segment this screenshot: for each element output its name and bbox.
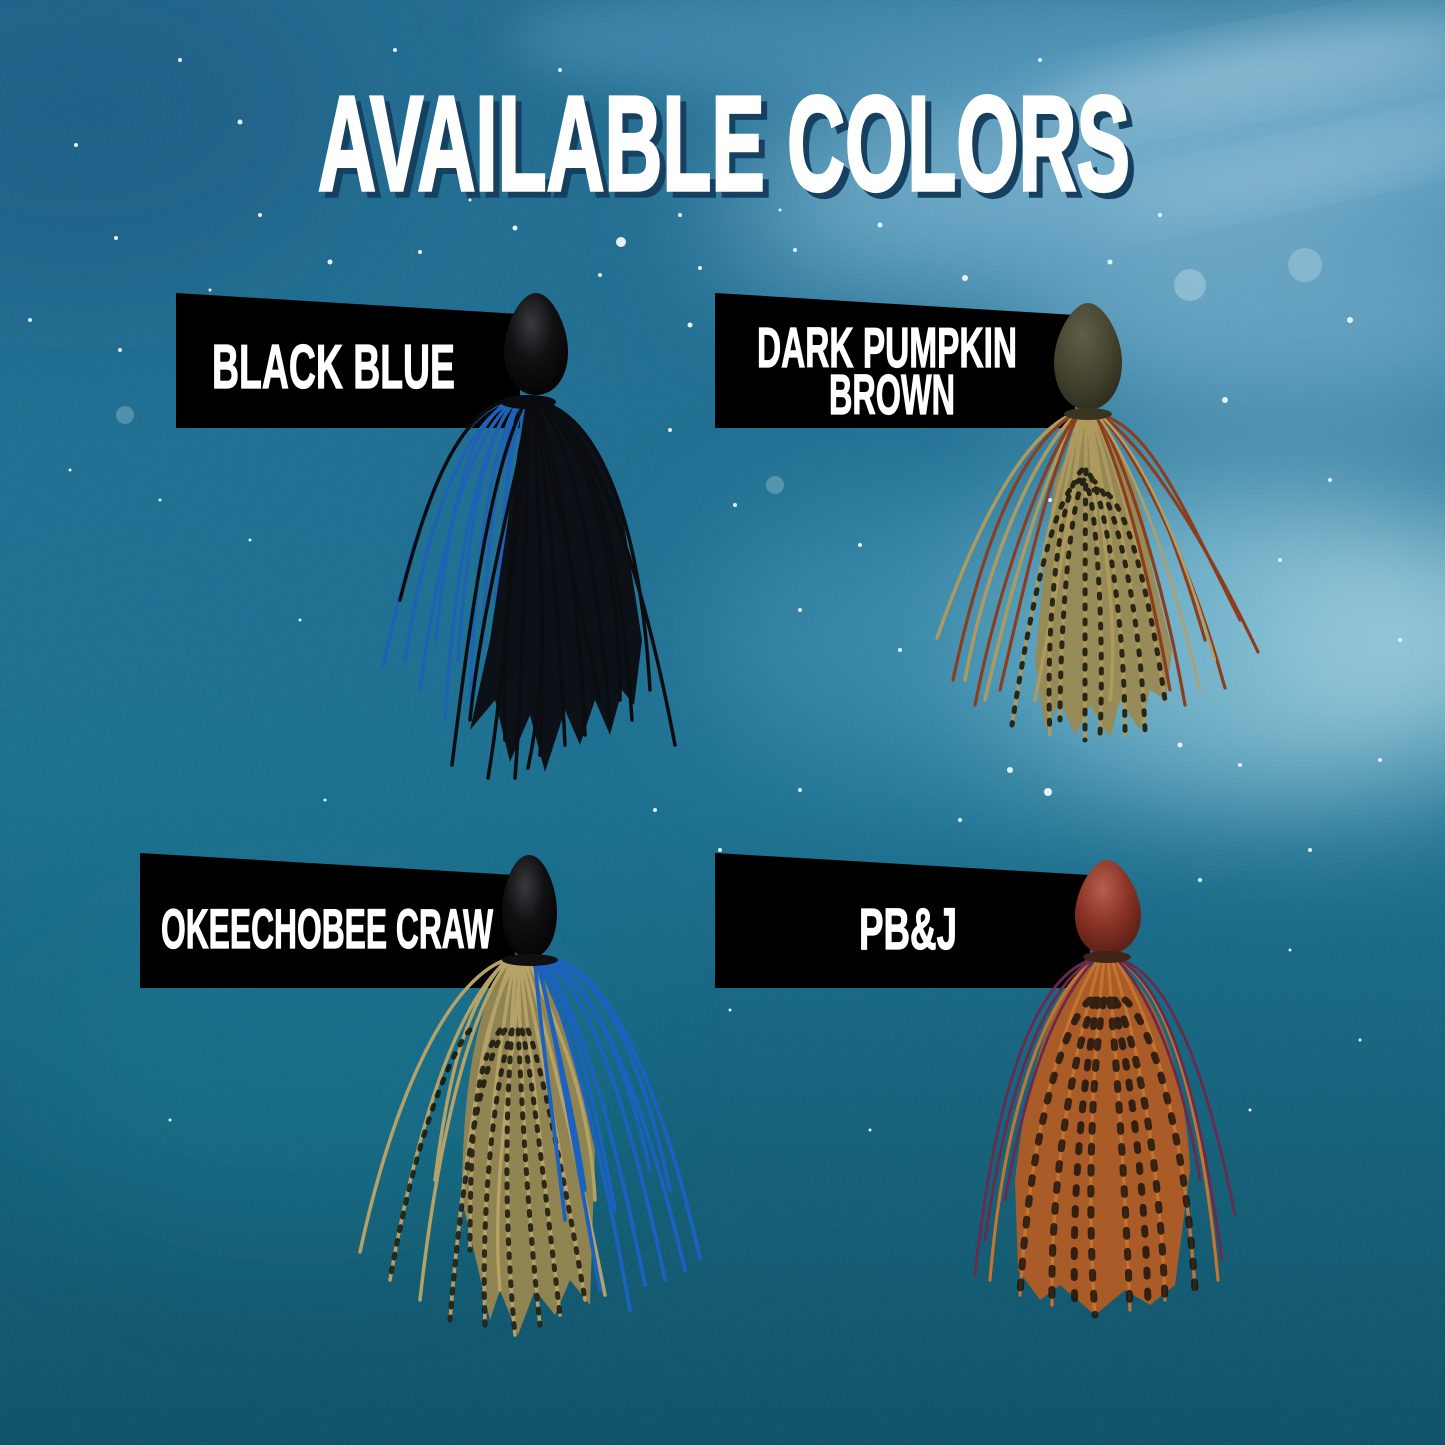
jig: PB&J xyxy=(975,860,1235,1315)
label: Dark Pumpkin Brown: DARK PUMPKIN xyxy=(757,316,1017,380)
jig: Black Blue xyxy=(383,293,675,778)
label: Dark Pumpkin Brown xyxy=(715,293,1075,428)
label: Okeechobee Craw xyxy=(140,853,515,988)
label: PB&J: PB&J xyxy=(859,897,957,962)
label: Black Blue xyxy=(176,293,520,428)
label: Okeechobee Craw: OKEECHOBEE CRAW xyxy=(161,897,493,960)
background: floating particles xyxy=(28,48,1402,1132)
jig: Okeechobee Craw xyxy=(360,855,700,1335)
jig: Dark Pumpkin Brown xyxy=(937,303,1258,740)
label: Black Blue: BLACK BLUE xyxy=(212,333,455,402)
label: PB&J xyxy=(715,853,1090,988)
label: Dark Pumpkin Brown: BROWN xyxy=(829,363,955,427)
